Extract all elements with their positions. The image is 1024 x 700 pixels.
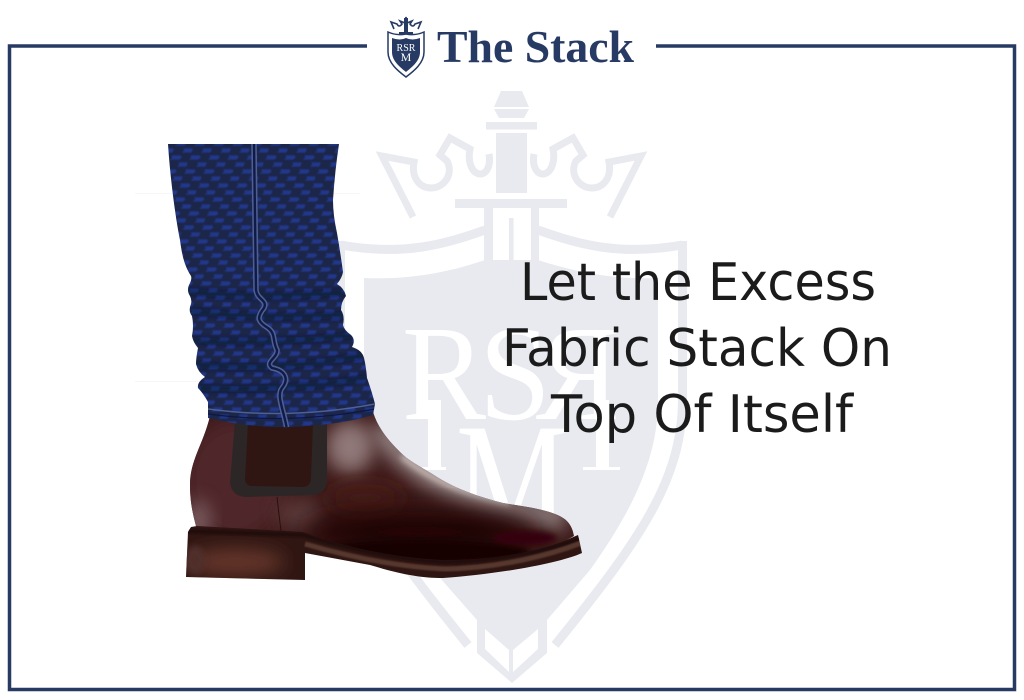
watermark monogram: R [402,299,486,449]
headline text [502,253,892,445]
faint guide lines [135,193,400,382]
watermark monogram: R [536,299,620,449]
headline text: Top Of Itself [550,385,855,445]
trouser fold shading [185,291,367,389]
watermark crown [382,138,641,217]
illustration: trouser leg and chelsea boot [160,140,590,585]
icon: small crest logo [388,17,424,77]
trouser leg [168,144,375,428]
watermark monogram: S [479,299,551,449]
boot elastic panel [230,420,327,497]
headline text: Fabric Stack On [502,319,892,379]
icon: small crest logo: M [401,50,412,64]
trouser seam [254,144,287,430]
watermark sword [455,91,567,262]
header [388,17,634,77]
watermark shield body [364,260,658,683]
watermark crest [340,91,682,683]
watermark monogram [402,299,620,577]
trouser hem [208,404,375,413]
watermark shield outline [340,230,682,645]
boot sole and heel [186,526,582,580]
boot upper [190,412,574,560]
watermark monogram: M [456,389,568,577]
title: The Stack [437,22,634,72]
chelsea boot [186,412,582,580]
icon: small crest logo: RSR [397,43,416,54]
headline text: Let the Excess [520,253,876,313]
watermark shield bottom panels [485,629,538,672]
